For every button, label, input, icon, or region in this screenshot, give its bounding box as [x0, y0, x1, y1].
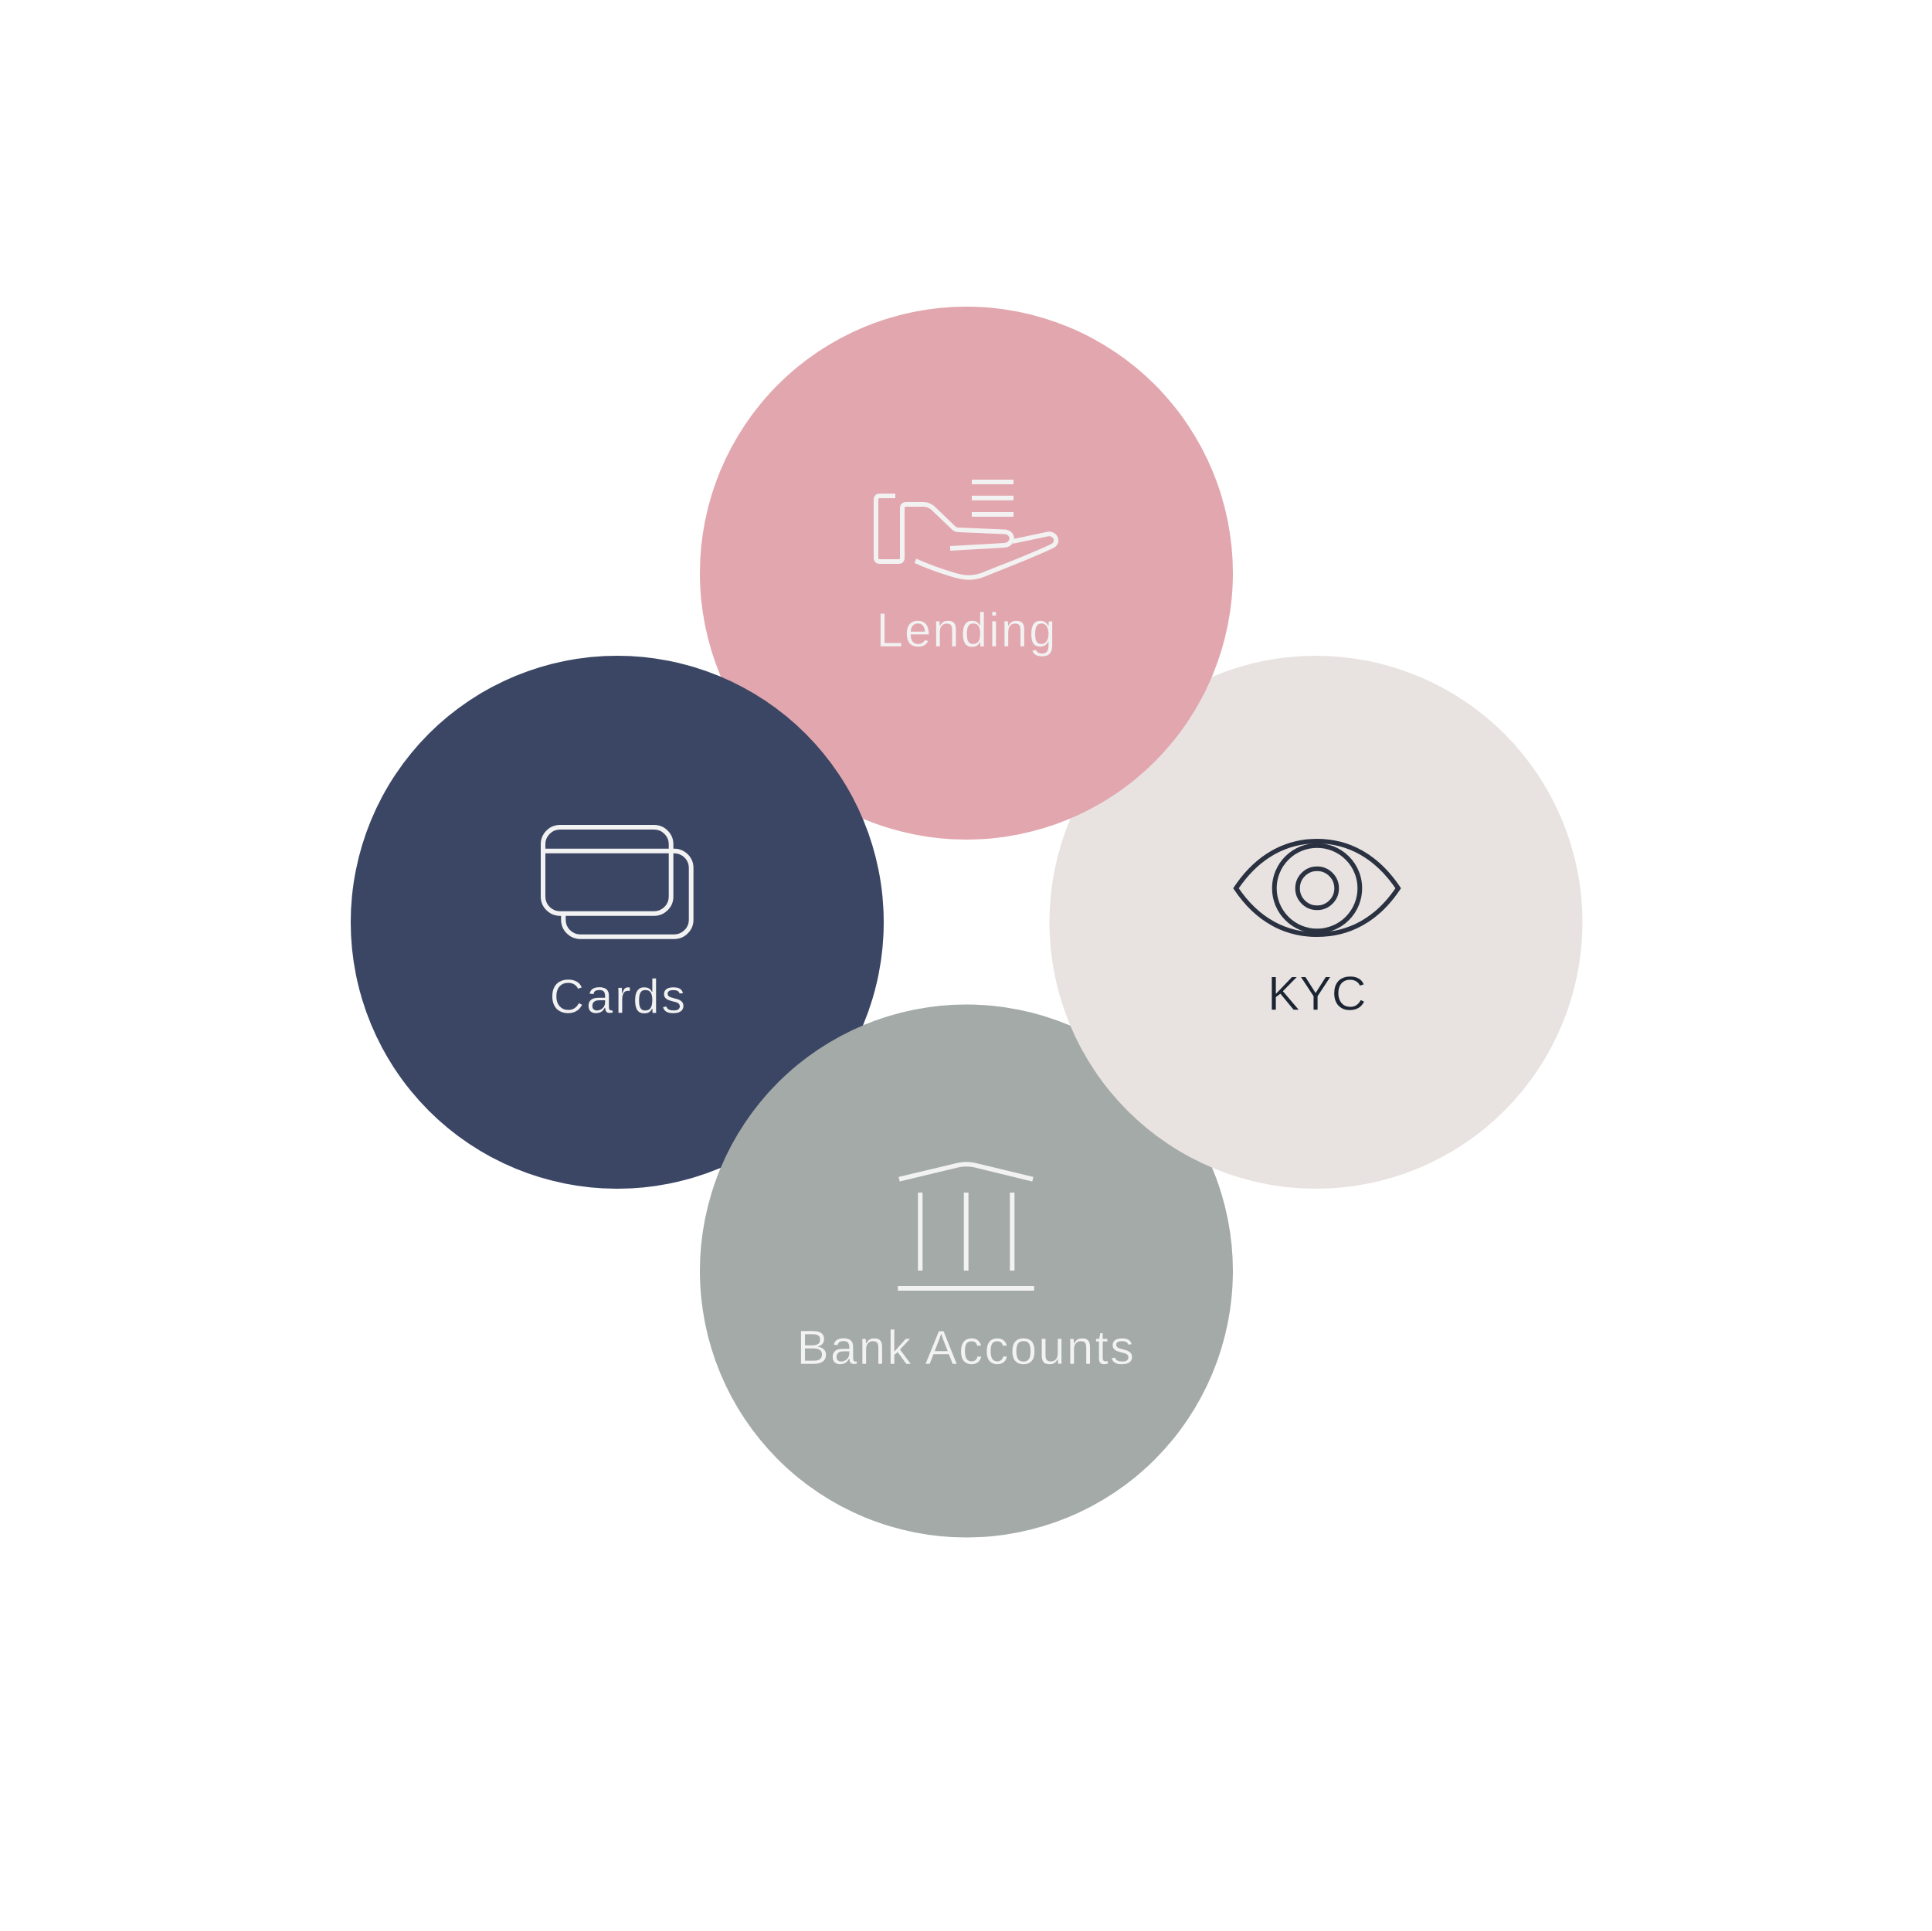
panel: Lending [700, 307, 1233, 840]
icon: hand with coins [876, 482, 1056, 578]
label: KYC: KYC [1268, 968, 1366, 1021]
icon: credit cards [543, 827, 691, 937]
overlap: Bank Accounts circle over Cards circle [719, 1024, 865, 1171]
circle: Lending background [700, 307, 1233, 840]
circle: Bank Accounts background [700, 1004, 1233, 1537]
panel: Bank Accounts [700, 1004, 1233, 1537]
label: Bank Accounts: Bank Accounts [797, 1322, 1136, 1375]
circle: KYC background [1049, 656, 1582, 1189]
panel: KYC [1049, 656, 1582, 1189]
icon: eye [1236, 841, 1398, 935]
panel: Cards [351, 656, 884, 1189]
label: Lending: Lending [876, 604, 1057, 657]
icon: bank building [898, 1164, 1034, 1288]
circle: Cards background [351, 656, 884, 1189]
label: Cards: Cards [550, 971, 688, 1024]
